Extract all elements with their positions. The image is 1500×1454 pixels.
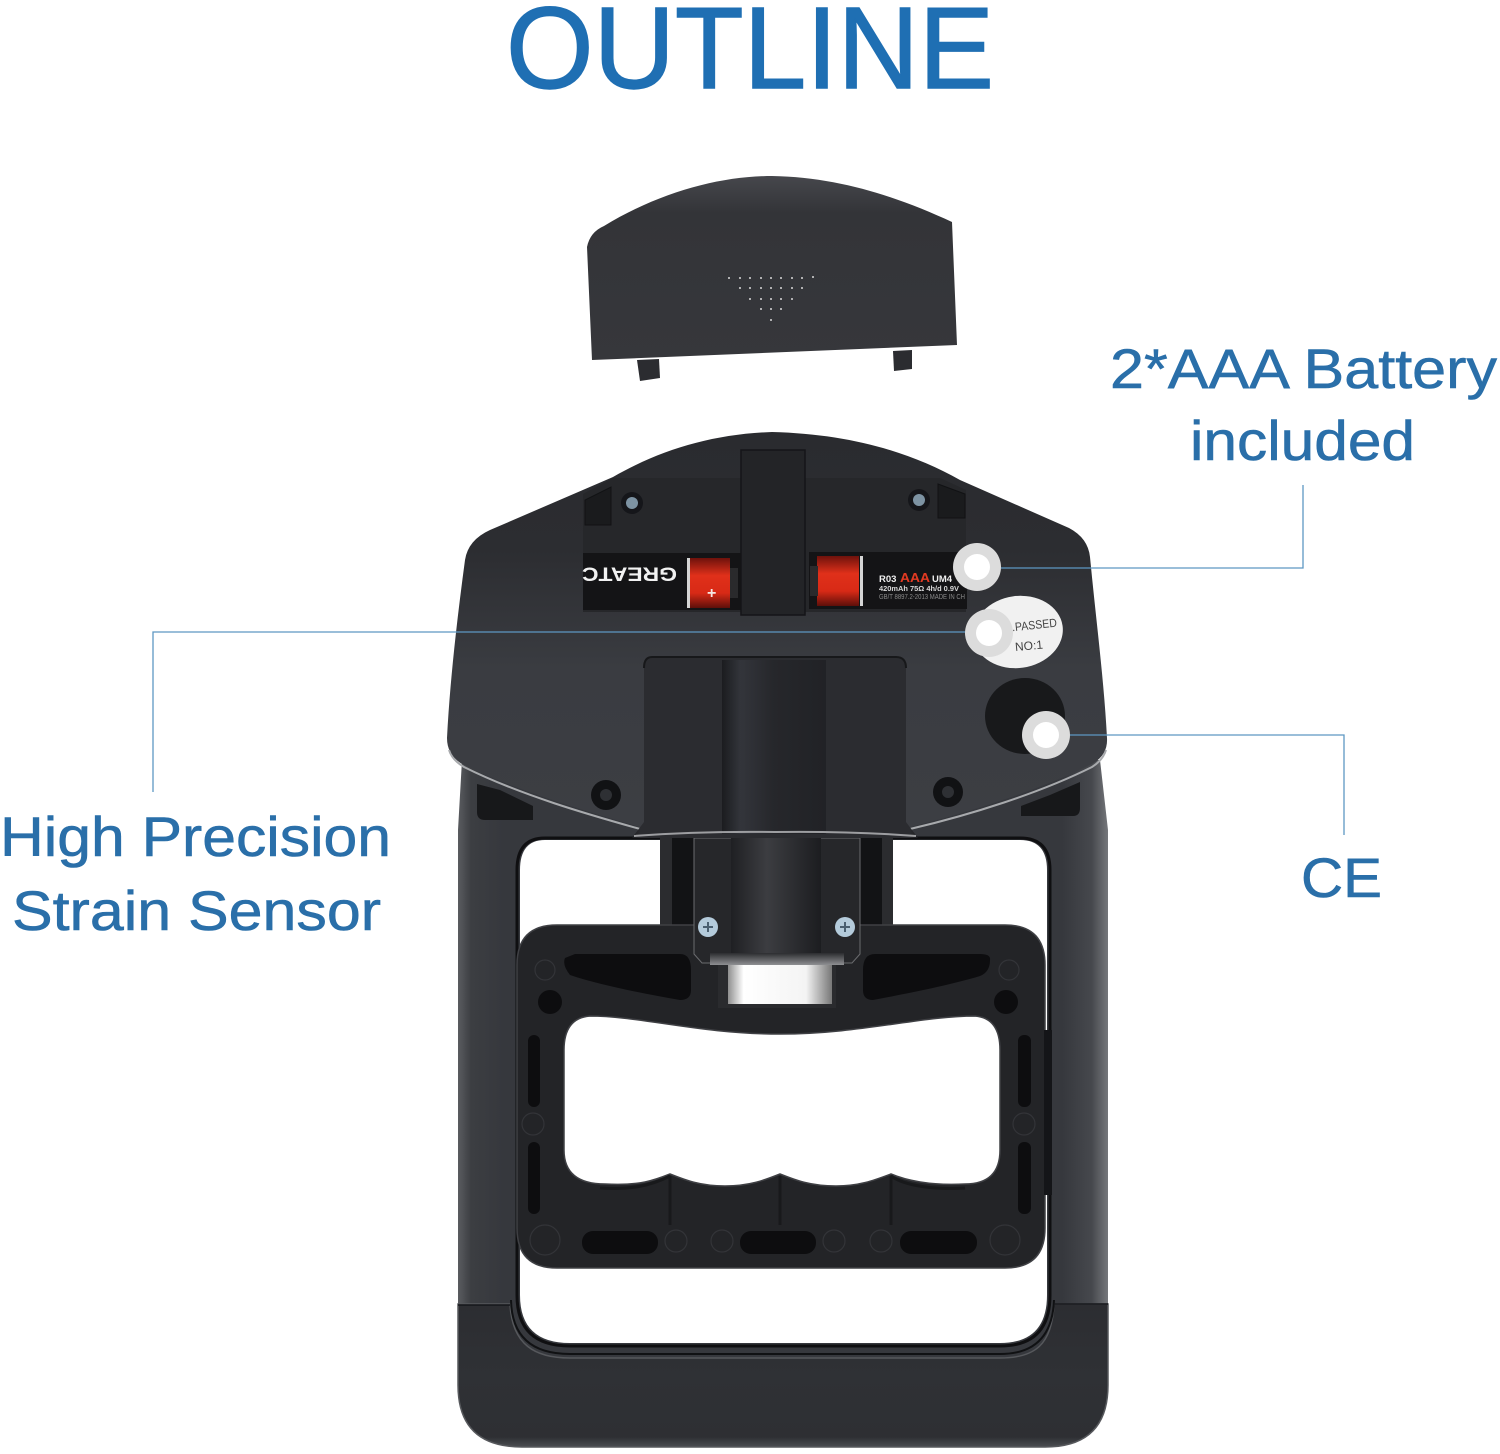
battery right: AAA	[900, 570, 931, 585]
battery right	[809, 552, 967, 609]
passed sticker: .PASSED	[1011, 616, 1058, 634]
bracket screw right	[835, 917, 855, 937]
outer window rim	[511, 1300, 1054, 1354]
label: CE: CE	[1301, 846, 1382, 909]
battery left	[582, 553, 741, 610]
battery left: +	[707, 585, 716, 602]
battery cover	[587, 176, 957, 381]
battery left: GREATC	[582, 562, 677, 584]
battery right: 420mAh 75Ω 4h/d 0.9V	[879, 584, 959, 593]
compartment corner wedge right	[938, 484, 965, 518]
compartment screw right	[908, 489, 930, 511]
frame shoulders notch right	[1021, 782, 1080, 816]
bracket	[694, 838, 860, 963]
label: strain sensor: High Precision	[0, 805, 391, 868]
passed sticker: NO:1	[1014, 638, 1044, 654]
sensor column	[710, 832, 844, 965]
label: battery: included	[1190, 409, 1415, 472]
housing screw right	[933, 777, 963, 807]
callout marker: battery	[953, 543, 1001, 591]
outer frame	[458, 760, 1108, 1447]
grip top edge	[644, 657, 906, 668]
battery right: UM4	[932, 574, 953, 585]
grip base highlight	[634, 832, 916, 836]
callout line: battery	[1001, 485, 1303, 568]
battery compartment	[583, 478, 966, 612]
label: strain sensor	[0, 805, 391, 942]
compartment screw left	[621, 492, 643, 514]
head housing	[447, 432, 1107, 827]
handle recess circles	[522, 960, 1035, 1255]
head lower highlight right	[910, 750, 1106, 829]
bracket screw left	[698, 917, 718, 937]
grip block	[632, 657, 918, 838]
speaker hole	[985, 678, 1065, 754]
label: battery	[1110, 337, 1497, 472]
battery right: GB/T 8897.2-2013 MADE IN CH	[879, 594, 965, 601]
handle slots	[528, 954, 1031, 1254]
compartment corner wedge left	[585, 487, 611, 525]
seam	[458, 1304, 1108, 1305]
lower frame section	[458, 1304, 1108, 1447]
housing screw left	[591, 780, 621, 810]
callout marker: CE	[1022, 711, 1070, 759]
stem block	[660, 830, 893, 930]
slider strip	[1044, 1030, 1052, 1195]
frame shoulders notch left	[477, 784, 533, 820]
center clip	[741, 450, 805, 615]
callout line: strain sensor	[153, 632, 966, 792]
passed sticker	[968, 590, 1068, 674]
callout marker: strain sensor	[965, 609, 1013, 657]
callout line: CE	[1070, 735, 1344, 835]
cover tab right	[893, 350, 912, 371]
handle	[517, 925, 1045, 1268]
battery right: R03	[879, 574, 896, 585]
cover tab left	[637, 359, 660, 381]
grip bevel shadow	[600, 1176, 965, 1225]
label: battery: 2*AAA Battery	[1110, 337, 1497, 400]
dynamometer device	[447, 432, 1108, 1447]
window rim	[517, 838, 1050, 1346]
label: strain sensor: Strain Sensor	[12, 879, 381, 942]
cover dot triangle	[728, 276, 814, 321]
metal spring	[718, 960, 836, 1008]
head lower highlight left	[449, 750, 640, 829]
